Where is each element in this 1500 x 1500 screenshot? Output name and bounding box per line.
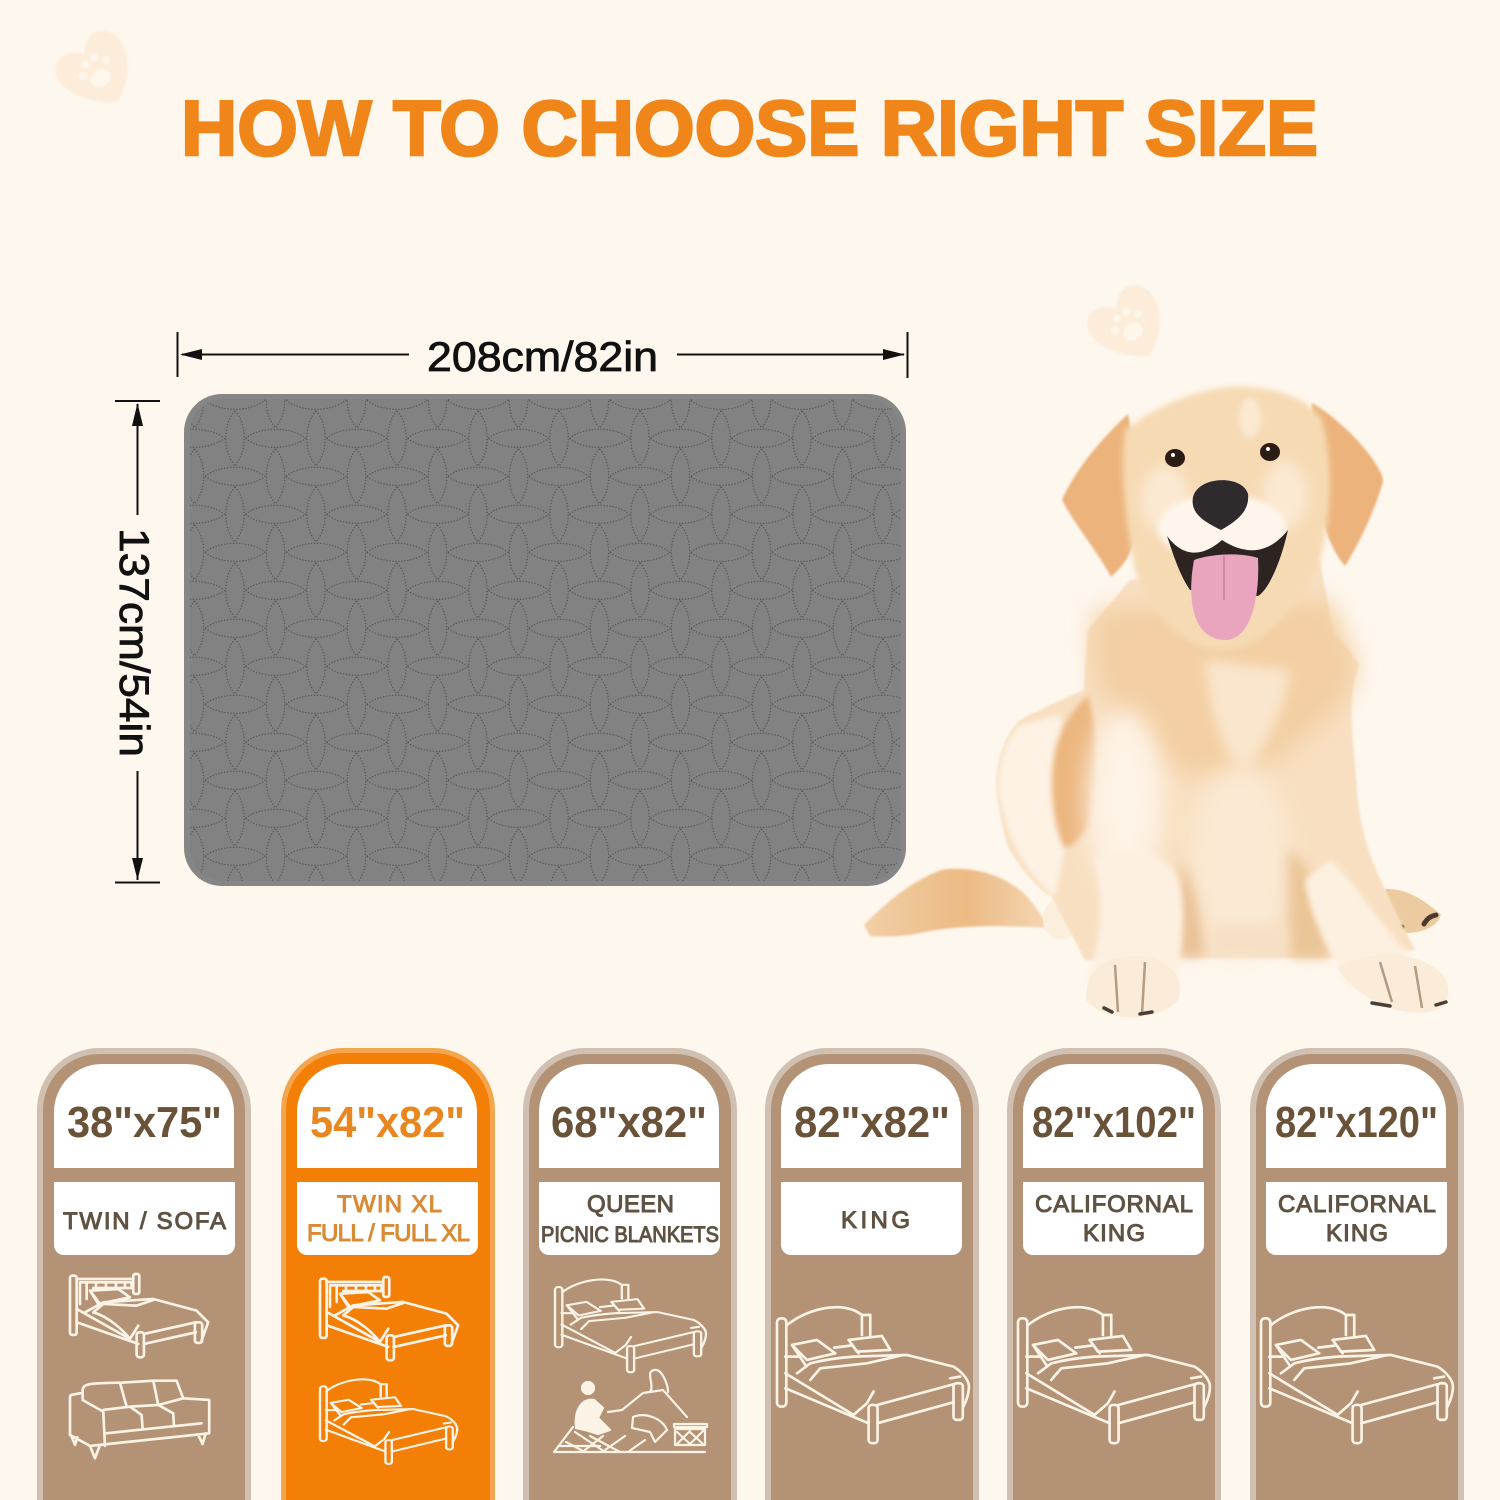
head	[1123, 387, 1330, 650]
decorative heart with paw, beside dog	[1080, 278, 1180, 377]
orange flank	[1052, 695, 1096, 847]
bed type label: FULL / FULL XL	[307, 1220, 470, 1247]
size value	[54, 1064, 234, 1168]
far paw	[1385, 889, 1441, 933]
icon: king bed	[1018, 1307, 1210, 1443]
size value	[1266, 1064, 1446, 1168]
leg shadows	[1180, 860, 1205, 958]
front paws	[1086, 956, 1180, 1017]
size value	[297, 1064, 477, 1168]
bed type label: CALIFORNAL	[1278, 1191, 1436, 1218]
size value: 54"x82"	[310, 1098, 465, 1147]
icon: twin bed	[320, 1277, 458, 1360]
bed type label	[54, 1182, 235, 1255]
quilted grey pad	[184, 394, 906, 886]
muzzle and cheeks	[1141, 466, 1189, 534]
size card 6	[1250, 1048, 1464, 1500]
mouth	[1167, 530, 1288, 596]
chest light	[1087, 710, 1163, 890]
bed type label: KING	[1083, 1220, 1145, 1247]
bed type label	[297, 1182, 478, 1255]
bed type label	[1023, 1182, 1204, 1255]
bed type label: QUEEN	[587, 1191, 674, 1218]
golden retriever	[864, 387, 1448, 1017]
tongue	[1191, 554, 1258, 640]
bed type label: TWIN / SOFA	[63, 1208, 226, 1235]
bed type label: KING	[841, 1207, 910, 1234]
nose	[1193, 480, 1248, 530]
neck ruff	[1092, 600, 1355, 778]
icon: king bed	[1261, 1307, 1453, 1443]
size card 4	[765, 1048, 979, 1500]
bed type label: TWIN XL	[337, 1191, 442, 1218]
icon: sofa	[70, 1381, 209, 1458]
bed type label: KING	[1326, 1220, 1388, 1247]
decorative heart with paw, top left	[48, 24, 148, 123]
width label: 208cm/82in	[427, 333, 658, 380]
bed type label: PICNIC BLANKETS	[541, 1222, 719, 1247]
right ear	[1311, 403, 1383, 566]
size card 5	[1007, 1048, 1221, 1500]
size value	[781, 1064, 961, 1168]
size value: 38"x75"	[67, 1098, 222, 1147]
tail	[864, 869, 1050, 937]
bed type label	[539, 1182, 720, 1255]
icon: picnic scene	[554, 1370, 707, 1452]
size card 3	[523, 1048, 737, 1500]
left ear	[1062, 414, 1140, 577]
height dimension	[111, 401, 160, 882]
size value: 82"x120"	[1275, 1098, 1438, 1147]
size card 1	[37, 1048, 251, 1500]
near hind paw	[1043, 898, 1079, 940]
right front leg	[1305, 860, 1410, 990]
height label: 137cm/54in	[111, 528, 158, 757]
left front leg	[1085, 850, 1182, 985]
size value: 82"x82"	[794, 1098, 950, 1147]
size value: 82"x102"	[1032, 1098, 1196, 1147]
width dimension	[178, 332, 908, 380]
bed type label: CALIFORNAL	[1035, 1191, 1193, 1218]
hip highlight	[998, 715, 1075, 897]
bed type label	[781, 1182, 962, 1255]
size card 2 (highlighted)	[281, 1048, 495, 1500]
eyes	[1165, 449, 1185, 467]
size value	[1023, 1064, 1203, 1168]
icon: twin bed	[70, 1274, 208, 1357]
title: HOW TO CHOOSE RIGHT SIZE	[181, 84, 1318, 172]
icon: arched bed	[555, 1280, 706, 1372]
icon: arched bed	[320, 1379, 457, 1464]
bed type label	[1266, 1182, 1447, 1255]
icon: king bed	[777, 1307, 969, 1443]
size value	[539, 1064, 719, 1168]
body silhouette	[996, 560, 1415, 960]
size value: 68"x82"	[551, 1098, 707, 1147]
